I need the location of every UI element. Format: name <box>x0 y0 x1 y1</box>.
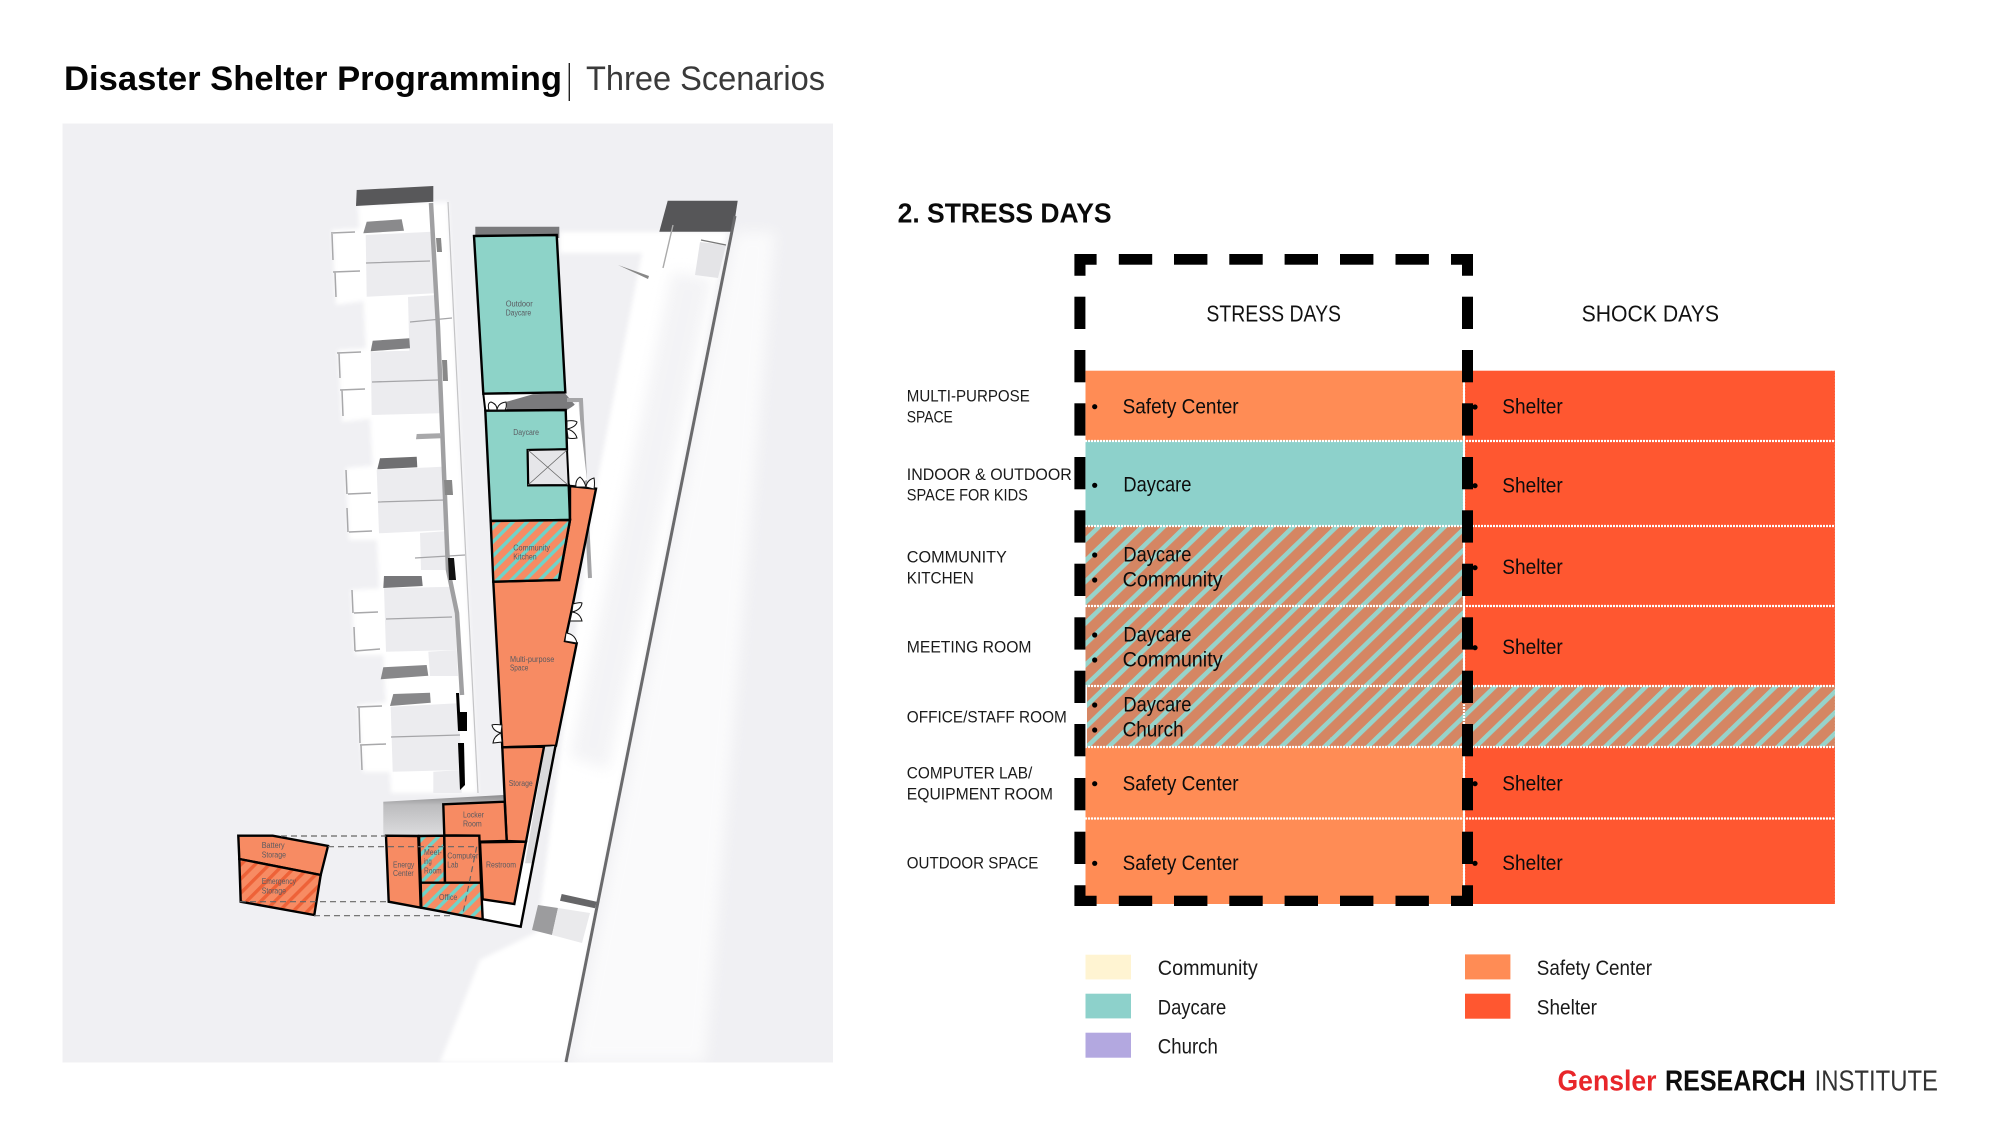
room: battery storage <box>238 836 328 875</box>
housing row <box>331 186 478 793</box>
room: battery storage: Storage <box>262 849 286 859</box>
title: Disaster Shelter Programming <box>64 60 562 98</box>
entry breezeway <box>483 392 590 578</box>
room: multi-purpose space <box>493 486 596 747</box>
room: emergency storage: Storage <box>262 885 286 895</box>
room: outdoor daycare: Outdoor <box>506 299 533 309</box>
room: locker room: Room <box>463 819 482 829</box>
underground connection dashes <box>240 836 477 916</box>
outer wall and gray strip <box>483 746 556 927</box>
section heading: 2. STRESS DAYS <box>898 198 1112 229</box>
row labels: SPACE <box>907 407 953 426</box>
stress days cell text: Safety Center <box>1123 852 1239 875</box>
stress days cell text: Safety Center <box>1123 395 1239 418</box>
row labels: MEETING ROOM <box>907 638 1032 657</box>
room: energy center <box>386 836 421 908</box>
room: restroom: Restroom <box>486 859 516 869</box>
row labels: OFFICE/STAFF ROOM <box>907 708 1067 727</box>
room: multi-purpose space: Space <box>510 663 528 673</box>
stress days cell text: Church <box>1123 719 1184 742</box>
room: energy center: Center <box>393 868 414 878</box>
panel: floor plan <box>62 124 833 1062</box>
top shadow behind outdoor daycare <box>475 227 559 238</box>
row labels: EQUIPMENT ROOM <box>907 784 1053 803</box>
shock days cell text: Shelter <box>1502 772 1563 795</box>
room: community kitchen: Kitchen <box>513 551 537 561</box>
room: daycare <box>485 410 570 521</box>
room: storage: Storage <box>509 778 533 788</box>
stress days cell text: Daycare <box>1123 624 1191 647</box>
column heading: stress days: STRESS DAYS <box>1206 301 1341 327</box>
row labels: COMMUNITY <box>907 547 1007 566</box>
room: multi-purpose space: Multi-purpose <box>510 654 554 664</box>
stress days cell text: Safety Center <box>1123 772 1239 795</box>
room: emergency storage: Emergency <box>262 876 297 886</box>
row labels: MULTI-PURPOSE <box>907 387 1030 406</box>
room: meeting room: Meet- <box>424 847 442 857</box>
row labels <box>907 387 1072 873</box>
room: computer lab: Computer <box>447 851 478 861</box>
room: computer lab: Lab <box>447 859 458 869</box>
legend: Safety Center <box>1537 957 1652 980</box>
shock days cell text: Shelter <box>1502 395 1563 418</box>
shock days cell text: Shelter <box>1502 556 1563 579</box>
shock days column cells <box>1463 371 1835 904</box>
shock days cell text <box>1502 395 1563 875</box>
room: meeting room: Room <box>424 865 442 875</box>
room: computer lab <box>444 836 481 883</box>
room: daycare: Daycare <box>513 427 539 437</box>
legend <box>1086 954 1652 1058</box>
room: outdoor daycare <box>474 235 565 394</box>
shock days cell text: Shelter <box>1502 636 1563 659</box>
stress days cell text: Daycare <box>1123 474 1191 497</box>
shock days cell text: Shelter <box>1502 852 1563 875</box>
column heading: shock days: SHOCK DAYS <box>1582 301 1719 327</box>
shock days bullets <box>1472 404 1478 866</box>
stress days cell text: Community <box>1123 569 1223 592</box>
room: office: Office <box>439 892 457 902</box>
stress days column cells <box>1086 371 1463 904</box>
room: storage <box>502 747 544 842</box>
room: outdoor daycare: Daycare <box>506 308 531 318</box>
legend: Community <box>1158 957 1258 980</box>
dashed highlight frame around stress days <box>1074 254 1473 906</box>
stress days cell text <box>1123 395 1239 875</box>
logo: Gensler Research Institute: RESEARCH <box>1665 1066 1806 1098</box>
door swings <box>488 402 594 743</box>
room: meeting room <box>419 836 445 883</box>
row labels: OUTDOOR SPACE <box>907 854 1038 873</box>
row labels: COMPUTER LAB/ <box>907 764 1033 783</box>
yard walls <box>331 232 386 770</box>
room: emergency storage <box>239 859 321 915</box>
table: programme matrix <box>907 371 1836 904</box>
gray service block <box>383 795 505 836</box>
row labels: SPACE FOR KIDS <box>907 486 1028 505</box>
shock days cell text: Shelter <box>1502 474 1563 497</box>
room: community kitchen <box>491 520 570 582</box>
legend: Daycare <box>1158 997 1226 1020</box>
room: locker room: Locker <box>463 809 484 819</box>
room: energy center: Energy <box>393 860 415 870</box>
room: restroom <box>480 842 526 904</box>
logo: Gensler Research Institute: Gensler <box>1558 1066 1656 1098</box>
stress days cell text: Community <box>1123 649 1223 672</box>
room: locker room <box>443 802 507 842</box>
room: battery storage: Battery <box>262 840 285 850</box>
room: office <box>421 883 483 919</box>
title: Three Scenarios <box>586 60 825 98</box>
room: meeting room: ing <box>424 856 432 866</box>
legend: Church <box>1158 1035 1218 1058</box>
stress days cell text: Daycare <box>1123 544 1191 567</box>
stress days bullets <box>1092 404 1097 866</box>
row labels: INDOOR & OUTDOOR <box>907 465 1072 484</box>
logo: Gensler Research Institute: INSTITUTE <box>1815 1066 1938 1098</box>
row labels: KITCHEN <box>907 568 974 587</box>
logo: Gensler Research Institute <box>1558 1066 1938 1098</box>
title <box>64 60 825 101</box>
road and site ground <box>440 201 775 1062</box>
legend: Shelter <box>1537 996 1597 1019</box>
room: community kitchen: Community <box>513 543 551 553</box>
stress days cell text: Daycare <box>1123 694 1191 717</box>
